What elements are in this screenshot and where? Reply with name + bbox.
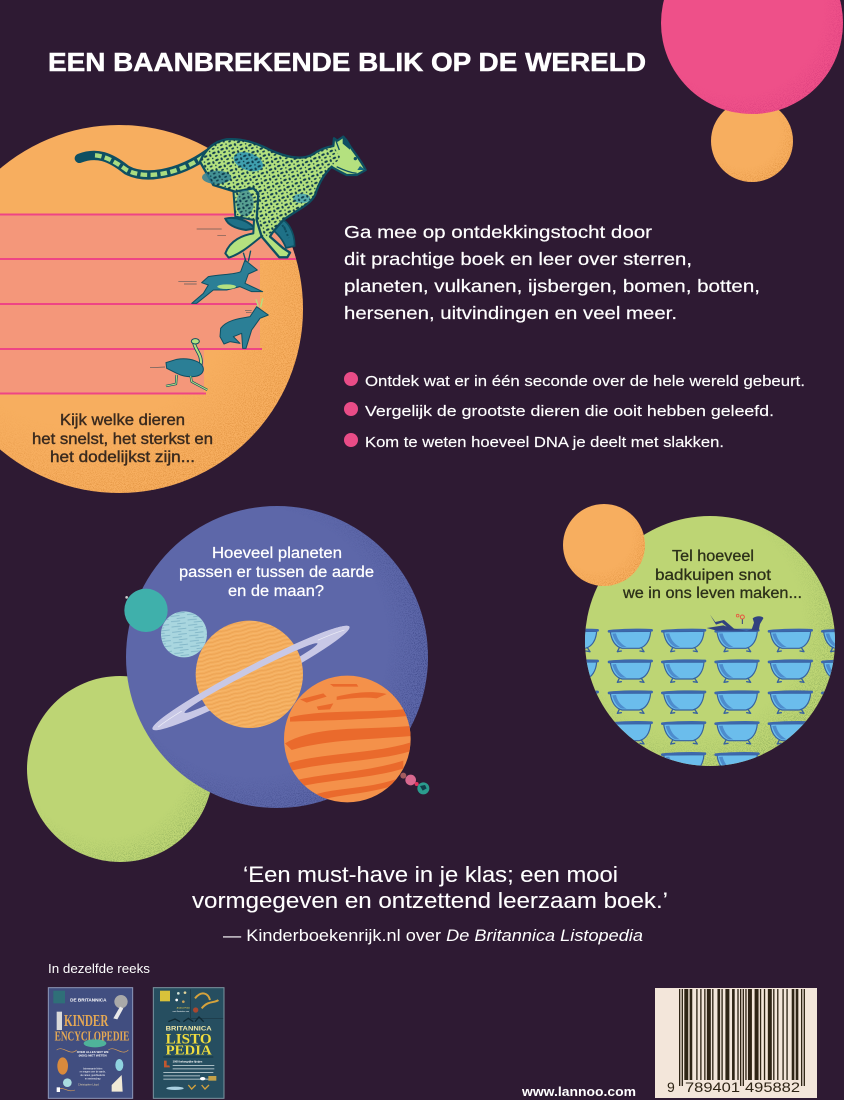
pink circle top right bbox=[661, 0, 843, 114]
planets: tiny row bbox=[400, 773, 429, 794]
caption: planets: en de maan? bbox=[228, 583, 324, 600]
book cover: Kinderencyclopedie bbox=[48, 988, 133, 1098]
caption: planets: passen er tussen de aarde bbox=[179, 564, 374, 581]
series label: In dezelfde reeks bbox=[48, 961, 151, 976]
intro paragraph: planeten, vulkanen, ijsbergen, bomen, botten, bbox=[344, 276, 760, 296]
caption: animals: het dodelijkst zijn... bbox=[50, 449, 195, 466]
caption: bathtubs bbox=[622, 548, 802, 602]
planet: teal bbox=[124, 589, 168, 632]
planet: ringed bbox=[152, 620, 350, 730]
book cover: Kinderencyclopedie: de natuur, geschiedenis bbox=[80, 1074, 106, 1077]
barcode digits: 495882 bbox=[745, 1079, 800, 1095]
book cover: Listopedia: 1000 belangrijke lijstjes bbox=[173, 1060, 203, 1064]
quote attribution: — Kinderboekenrijk.nl over De Britannica Listopedia bbox=[223, 927, 643, 945]
caption: animals: het snelst, het sterkst en bbox=[32, 431, 213, 448]
icon: antelope bbox=[220, 298, 268, 348]
book cover: Kinderencyclopedie: (NOG) NIET WETEN bbox=[79, 1054, 107, 1058]
book cover: Listopedia: PEDIA bbox=[166, 1043, 212, 1058]
planet illustrations bbox=[124, 589, 429, 802]
intro paragraph: dit prachtige boek en leer over sterren, bbox=[344, 249, 692, 269]
race track stripes bbox=[0, 214, 300, 394]
book cover: Kinderencyclopedie: en vragen over de aarde, bbox=[80, 1071, 106, 1074]
intro paragraph bbox=[344, 222, 760, 323]
panel: bathtubs bbox=[555, 504, 844, 775]
bullet 3: Kom te weten hoeveel DNA je deelt met slakken. bbox=[365, 434, 724, 451]
quote: ‘Een must-have in je klas; een mooi bbox=[243, 862, 618, 887]
blue disc bbox=[126, 506, 428, 808]
book cover: Kinderencyclopedie: KINDER bbox=[64, 1011, 109, 1030]
caption: animals: Kijk welke dieren bbox=[60, 412, 185, 429]
caption: bathtubs: badkuipen snot bbox=[655, 567, 772, 584]
green circle lower left bbox=[27, 676, 213, 862]
icon: cheetah bbox=[79, 137, 366, 258]
book cover: Listopedia: Andrew Pettie bbox=[177, 1007, 191, 1010]
caption: bathtubs: we in ons leven maken... bbox=[622, 585, 802, 602]
bullet 1: Ontdek wat er in één seconde over de hele wereld gebeurt. bbox=[365, 373, 805, 390]
planet: striped orange bbox=[284, 676, 412, 802]
book cover: Listopedia: LISTO bbox=[166, 1031, 212, 1047]
panel: planets bbox=[124, 506, 429, 808]
icon: gazelle bbox=[178, 251, 263, 303]
book cover: Listopedia bbox=[153, 988, 224, 1098]
caption: bathtubs: Tel hoeveel bbox=[672, 548, 754, 565]
book cover: Kinderencyclopedie: Christopher Lloyd bbox=[78, 1082, 99, 1086]
book cover: Kinderencyclopedie: OVER ALLES WAT WE bbox=[77, 1050, 109, 1054]
book cover: Kinderencyclopedie: en wetenschap bbox=[85, 1077, 101, 1080]
orange circle top right bbox=[711, 100, 793, 182]
book cover: Listopedia: BRITANNICA bbox=[166, 1025, 212, 1032]
icon: ostrich bbox=[150, 229, 226, 390]
orange disc bbox=[0, 125, 303, 493]
quote bbox=[192, 862, 668, 945]
book cover: Kinderencyclopedie: DE BRITANNICA bbox=[70, 998, 107, 1003]
caption: planets bbox=[179, 545, 374, 600]
panel: fastest animals bbox=[0, 125, 366, 493]
barcode digits: 789401 bbox=[685, 1079, 740, 1095]
quote: vormgegeven en ontzettend leerzaam boek.’ bbox=[192, 888, 668, 913]
intro paragraph: Ga mee op ontdekkingstocht door bbox=[344, 222, 652, 242]
planet: pale blue bbox=[160, 610, 208, 658]
bullet 2: Vergelijk de grootste dieren die ooit hebben geleefd. bbox=[365, 403, 774, 420]
caption: planets: Hoeveel planeten bbox=[212, 545, 342, 562]
barcode digits bbox=[667, 1079, 800, 1095]
barcode bbox=[655, 988, 817, 1098]
green disc bbox=[585, 516, 835, 766]
icon: woman in bath bbox=[707, 614, 763, 631]
bathtub grid bbox=[585, 614, 835, 766]
barcode digits: 9 bbox=[667, 1079, 675, 1095]
book cover: Listopedia: met illustraties van bbox=[173, 1010, 189, 1013]
website: www.lannoo.com bbox=[521, 1084, 636, 1099]
book cover: Kinderencyclopedie: Interessante feiten bbox=[83, 1067, 103, 1070]
title: EEN BAANBREKENDE BLIK OP DE WERELD bbox=[48, 47, 646, 77]
barcode bars bbox=[679, 989, 805, 1086]
bullet list bbox=[344, 372, 805, 451]
intro paragraph: hersenen, uitvindingen en veel meer. bbox=[344, 303, 677, 323]
caption: animals bbox=[32, 412, 213, 466]
book cover: Kinderencyclopedie: ENCYCLOPEDIE bbox=[55, 1030, 129, 1045]
orange circle on bath disc bbox=[563, 504, 645, 586]
